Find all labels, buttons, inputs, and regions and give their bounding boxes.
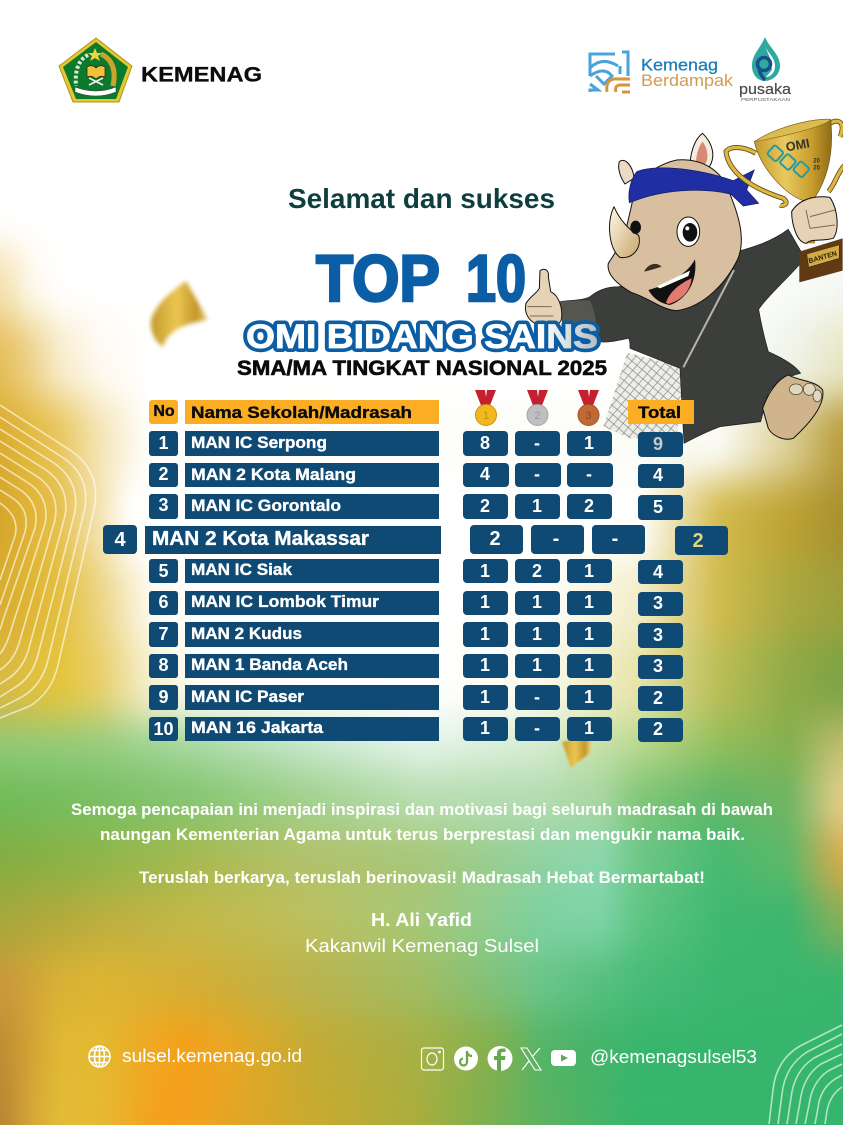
row 10: 1 [584,718,594,738]
social handle: @kemenagsulsel53 [590,1047,757,1067]
row 10: 1 [480,718,490,738]
mascot ears [619,133,713,184]
row 8: 3 [653,656,663,676]
row 9: - [534,687,540,707]
row 9: 2 [653,688,663,708]
table header: No [153,403,175,420]
row 6: 1 [532,592,542,612]
pusaka logo: PERPUSTAKAAN [741,97,790,102]
row 7 [149,622,683,648]
row 6: 3 [653,593,663,613]
row 5: 5 [158,561,169,581]
row 9: 1 [584,687,594,707]
icon: X [521,1048,541,1070]
row 10: 10 [153,719,174,739]
row 1: 9 [653,434,663,454]
row 8: 1 [532,655,542,675]
mascot trophy: 25 [813,165,821,171]
table header: Total [638,403,681,422]
title top 10 [316,241,526,315]
row 6: MAN IC Lombok Timur [191,592,379,611]
row 6: 1 [584,592,594,612]
row 8: 8 [158,655,169,675]
row 1: - [534,433,540,453]
Kemenag wordmark: KEMENAG [141,64,262,86]
mascot trophy [726,119,843,243]
mascot nostril [644,264,662,272]
row 4 highlighted: - [553,528,559,550]
row 3: 5 [653,497,663,517]
icon: globe [89,1046,110,1067]
row 1 [149,431,683,457]
mascot mouth [648,259,695,305]
row 8: 1 [480,655,490,675]
row 2: - [534,464,540,484]
row 5 [149,559,683,584]
trophy base: BANTEN [808,250,838,265]
row 1: 1 [158,433,169,453]
pusaka logo: pusaka [739,81,792,98]
table header: Nama Sekolah/Madrasah [191,403,412,422]
row 2 [149,463,684,488]
row 8 [149,654,683,679]
row 4 highlighted: 2 [489,528,501,550]
row 4 highlighted: 4 [114,529,126,551]
row 1: 8 [480,433,490,453]
title top 10: 10 [466,241,526,315]
silver medal icon [527,390,548,426]
row 10: MAN 16 Jakarta [191,718,324,737]
row 9: MAN IC Paser [191,687,304,706]
row 4 highlighted [103,525,728,555]
row 5: MAN IC Siak [191,560,293,579]
trophy base [799,238,843,282]
title OMI Bidang Sains: OMI BIDANG SAINS [246,318,598,356]
mascot eyes [630,217,700,246]
row 9: 9 [158,687,169,707]
row 10: - [534,718,540,738]
row 7: 1 [584,624,594,644]
gold medal icon: 1 [483,410,489,422]
row 3: MAN IC Gorontalo [191,496,341,515]
row 4 highlighted: 2 [692,530,704,552]
concentric lines left [0,405,96,718]
row 7: 3 [653,625,663,645]
table header [149,400,694,424]
title top 10: TOP [316,241,440,315]
silver medal icon: 2 [534,410,541,422]
closing message: Semoga pencapaian ini menjadi inspirasi dan motivasi bagi seluruh madrasah di bawah [71,801,773,819]
mascot head [608,160,741,311]
bronze medal icon: 3 [585,410,592,422]
icon: instagram [422,1048,444,1070]
icon: facebook [488,1046,512,1071]
row 3 [149,494,683,520]
icon: youtube [551,1050,576,1066]
signatory title: Kakanwil Kemenag Sulsel [305,936,539,956]
row 7: 7 [158,624,169,644]
mascot horn [610,207,639,258]
mascot body [560,229,805,443]
row 2: - [586,464,592,484]
row 6 [149,591,683,616]
decorative gold ribbon bottom [562,735,591,768]
row 7: MAN 2 Kudus [191,624,302,643]
row 7: 1 [532,624,542,644]
mascot trophy: 20 [813,159,821,165]
row 4 highlighted: - [612,528,618,550]
medal table [103,390,728,742]
title OMI Bidang Sains: OMI BIDANG SAINS [246,318,598,356]
closing message: naungan Kementerian Agama untuk terus berprestasi dan mengukir nama baik. [100,826,745,844]
logo text: Kemenag [641,56,718,74]
mascot right hand [792,197,837,243]
mascot trophy: OMI [785,136,811,154]
row 6: 6 [158,592,169,612]
pusaka logo [739,37,792,102]
mascot net bag [603,353,684,438]
mascot left hand [525,269,562,327]
row 3: 1 [532,496,542,516]
mascot bandana [629,168,759,206]
row 9 [149,685,683,711]
concentric lines bottom right [769,1025,842,1124]
row 2: MAN 2 Kota Malang [191,465,356,484]
mascot left sleeve shading [560,301,597,341]
row 5: 2 [532,561,542,581]
closing message: Teruslah berkarya, teruslah berinovasi! Madrasah Hebat Bermartabat! [139,869,705,887]
row 1: MAN IC Serpong [191,433,327,452]
row 8: MAN 1 Banda Aceh [191,655,348,674]
Kemenag Berdampak logo [590,52,734,92]
closing message [71,801,773,887]
row 3: 2 [480,496,490,516]
row 4 highlighted: MAN 2 Kota Makassar [152,528,369,550]
mascot foot [763,375,823,439]
bronze medal icon [578,390,599,426]
mascot bag cord [683,270,734,367]
row 5: 1 [480,561,490,581]
subtitle greeting: Selamat dan sukses [288,183,555,214]
row 2: 4 [653,465,663,485]
row 9: 1 [480,687,490,707]
row 5: 1 [584,561,594,581]
Kemenag emblem [59,38,132,102]
icon: tiktok [454,1046,478,1070]
row 2: 4 [480,464,490,484]
logo icon [590,52,630,92]
row 5: 4 [653,562,663,582]
decorative gold ribbon left [151,281,208,347]
row 3: 3 [158,495,169,515]
row 10: 2 [653,719,663,739]
row 10 [149,717,683,742]
row 1: 1 [584,433,594,453]
Kemenag Berdampak logo: Berdampak [641,71,734,90]
mascot: rhino holding trophy [525,119,843,443]
row 3: 2 [584,496,594,516]
row 6: 1 [480,592,490,612]
title level and year: SMA/MA TINGKAT NASIONAL 2025 [237,357,607,380]
row 8: 1 [584,655,594,675]
gold medal icon [475,390,496,426]
row 7: 1 [480,624,490,644]
row 2: 2 [158,464,169,484]
website: sulsel.kemenag.go.id [122,1046,302,1066]
signatory name: H. Ali Yafid [371,910,472,930]
